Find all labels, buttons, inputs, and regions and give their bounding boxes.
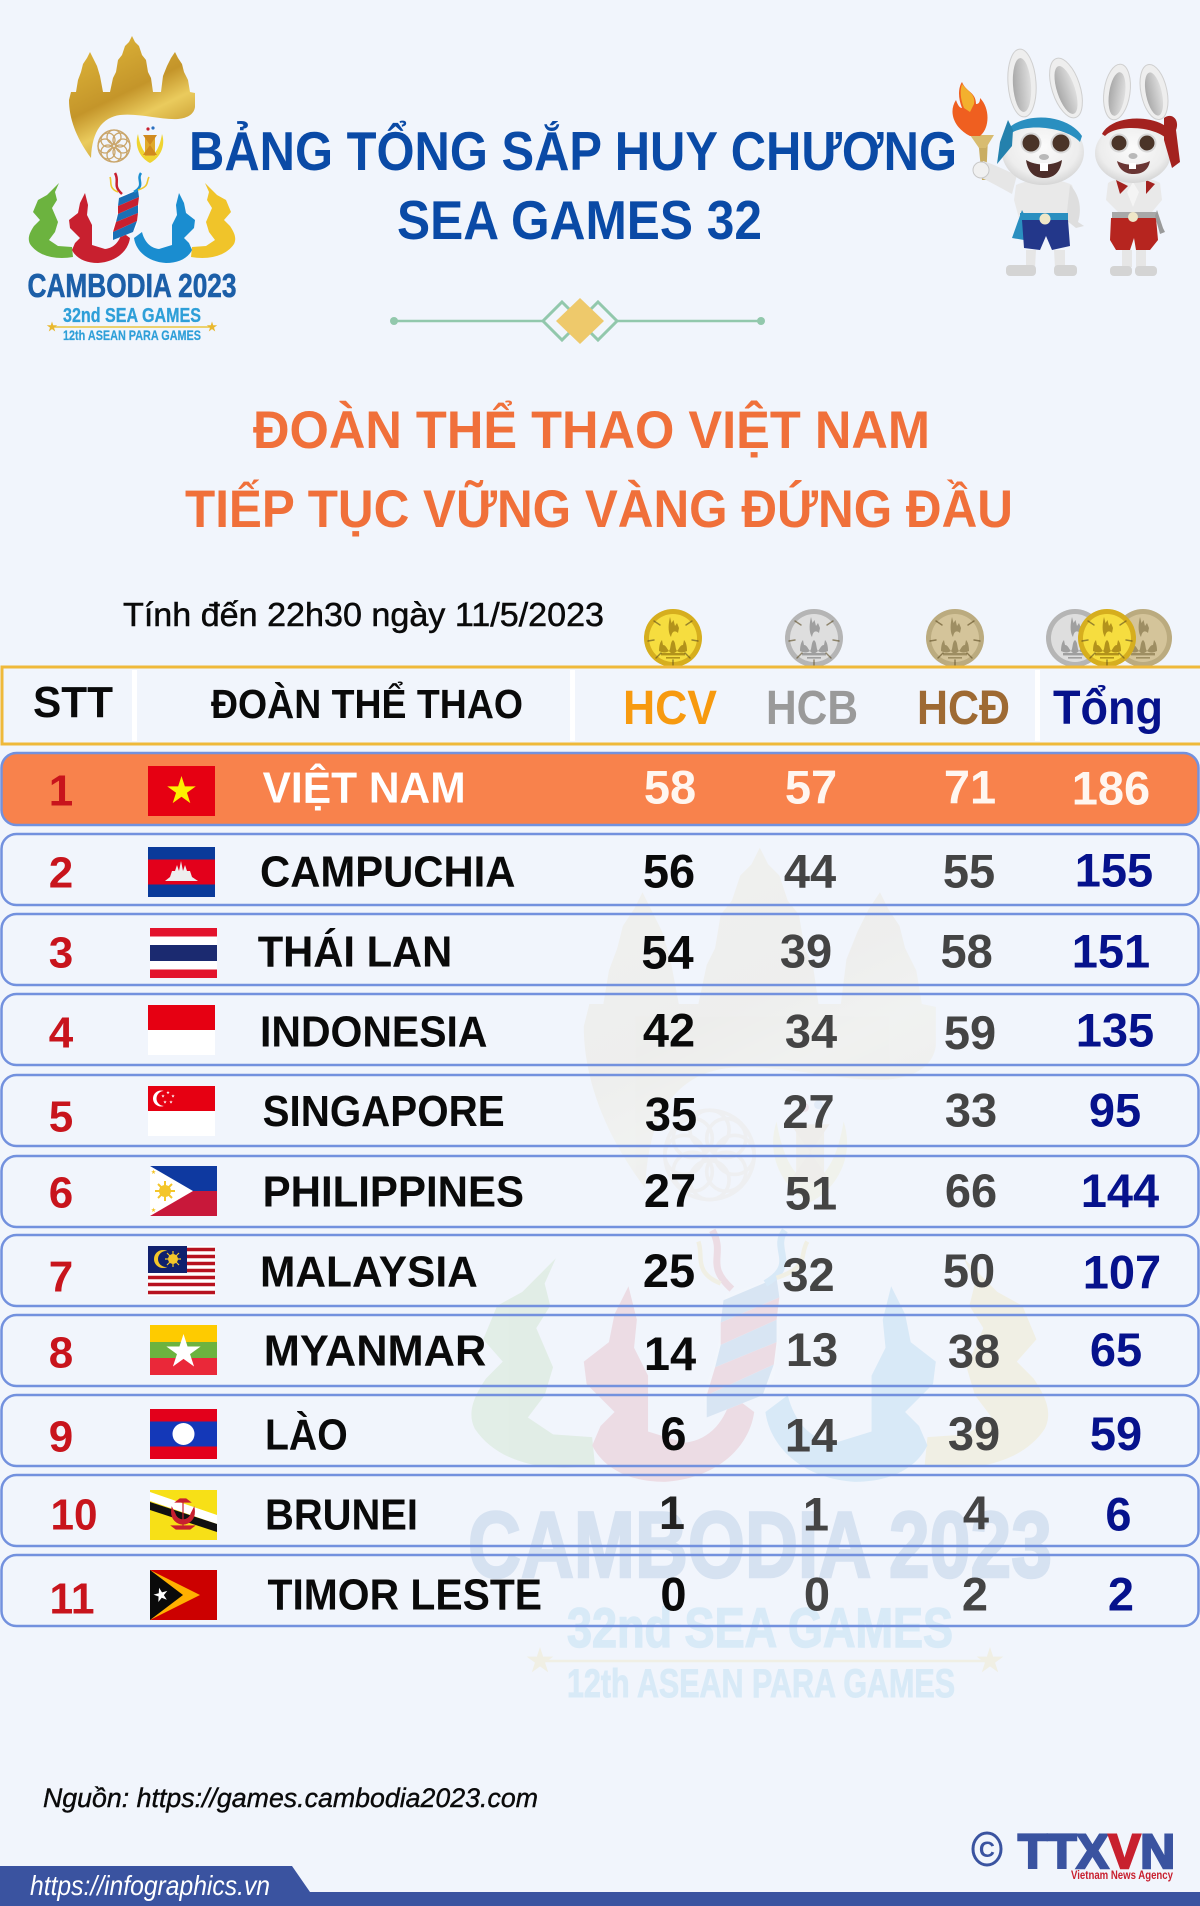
- flag: Malaysia: [148, 1246, 215, 1296]
- row 7: Malaysia: 7: [49, 1252, 73, 1302]
- medal counts: 186: [1072, 762, 1150, 814]
- title: BẢNG TỔNG SẮP HUY CHƯƠNG: [189, 120, 957, 182]
- medal counts: 58: [644, 760, 696, 814]
- row 6: Philippines: PHILIPPINES: [263, 1168, 524, 1216]
- row 11: Timor Leste: [2, 1555, 1198, 1626]
- medal counts: 35: [645, 1088, 697, 1140]
- row 1: Việt Nam: 1: [49, 766, 73, 816]
- medal counts: 13: [786, 1323, 838, 1376]
- flag: Brunei: [150, 1490, 217, 1540]
- flag: Cambodia: [148, 847, 215, 897]
- watermark: Cambodia 2023 logo: 32nd SEA GAMES: [567, 1596, 953, 1659]
- row 4: Indonesia: [2, 994, 1198, 1065]
- row 4: Indonesia: INDONESIA: [260, 1008, 488, 1056]
- row 2: Campuchia: 2: [49, 848, 73, 898]
- medal counts: 71: [944, 760, 996, 814]
- row 5: Singapore: [2, 1075, 1198, 1146]
- icon: silver medal: [785, 609, 843, 667]
- row 1: Việt Nam: [2, 753, 1198, 825]
- table header: HCB: [766, 682, 858, 735]
- medal counts: 1: [803, 1488, 829, 1540]
- subtitle: [185, 399, 1013, 539]
- flag: Myanmar: [150, 1325, 217, 1375]
- logo: TTXVN: Vietnam News Agency: [1071, 1868, 1173, 1882]
- watermark: Cambodia 2023 logo: 12th ASEAN PARA GAMES: [567, 1662, 955, 1706]
- medal counts: 51: [785, 1166, 837, 1220]
- footer band with website: [0, 1866, 1200, 1906]
- medal counts: 38: [948, 1324, 1000, 1378]
- logo: Cambodia 2023 SEA Games: [28, 36, 236, 343]
- medal counts: [659, 1486, 1132, 1540]
- row 3: Thái Lan: 3: [49, 928, 73, 978]
- title: SEA GAMES 32: [397, 189, 762, 251]
- logo: TTXVN: C: [979, 1837, 995, 1862]
- medal counts: [644, 1164, 1159, 1220]
- row 9: Lào: [2, 1395, 1198, 1466]
- row 3: Thái Lan: THÁI LAN: [258, 926, 452, 976]
- row 8: Myanmar: 8: [49, 1328, 73, 1378]
- row 10: Brunei: [2, 1475, 1198, 1546]
- row 11: Timor Leste: 11: [50, 1574, 94, 1624]
- medal counts: [644, 1323, 1142, 1380]
- medal icons: [644, 609, 1172, 667]
- logo: TTXVN: TTXVN: [1018, 1826, 1175, 1879]
- medal counts: 0: [660, 1568, 687, 1620]
- icon: three medals: [1046, 609, 1172, 667]
- medal counts: 4: [963, 1486, 989, 1539]
- title: [189, 120, 957, 251]
- medal counts: 59: [944, 1006, 996, 1059]
- row 8: Myanmar: [2, 1315, 1198, 1386]
- row 2: Campuchia: [2, 834, 1198, 905]
- medal counts: 14: [785, 1408, 837, 1462]
- medal counts: [643, 844, 1153, 898]
- medal counts: 39: [780, 924, 832, 978]
- medal counts: 57: [785, 760, 837, 814]
- mascot: girl rabbit: [1095, 62, 1180, 276]
- row 6: Philippines: 6: [49, 1168, 73, 1218]
- flag: Thailand: [150, 928, 217, 978]
- row 9: Lào: LÀO: [265, 1410, 348, 1460]
- medal counts: [660, 1568, 1134, 1620]
- flag: Singapore: [148, 1086, 215, 1136]
- medal counts: [643, 1244, 1161, 1301]
- medal counts: 6: [660, 1407, 687, 1460]
- row 6: Philippines: [2, 1156, 1198, 1227]
- medal counts: [645, 1084, 1141, 1140]
- medal counts: 27: [782, 1085, 835, 1138]
- flag: Laos: [150, 1409, 217, 1459]
- medal counts: [644, 760, 1150, 814]
- medal counts: 107: [1083, 1246, 1161, 1298]
- medal counts: 66: [945, 1164, 997, 1217]
- medal counts: 95: [1089, 1084, 1141, 1136]
- table header: HCĐ: [917, 682, 1010, 735]
- row 8: Myanmar: MYANMAR: [264, 1326, 486, 1376]
- icon: bronze medal: [926, 609, 984, 667]
- medal counts: 1: [659, 1486, 685, 1539]
- medal counts: 50: [943, 1244, 995, 1297]
- table header: ĐOÀN THỂ THAO: [211, 680, 523, 727]
- medal counts: 144: [1081, 1164, 1159, 1217]
- logo: Cambodia 2023 SEA Games: 12th ASEAN PARA GAMES: [63, 327, 201, 343]
- medal counts: 42: [643, 1004, 695, 1056]
- medal counts: [641, 924, 1150, 978]
- row 4: Indonesia: 4: [49, 1008, 74, 1058]
- medal counts: 34: [785, 1004, 837, 1058]
- medal counts: 56: [643, 844, 695, 898]
- medal counts: 6: [1105, 1488, 1132, 1540]
- row 10: Brunei: 10: [50, 1490, 98, 1540]
- table header: STT: [33, 678, 113, 727]
- subtitle: TIẾP TỤC VỮNG VÀNG ĐỨNG ĐẦU: [185, 479, 1013, 539]
- medal counts: 14: [644, 1327, 696, 1380]
- flag: Vietnam: [148, 766, 215, 816]
- flag: Indonesia: [148, 1005, 215, 1055]
- torch: [952, 82, 994, 180]
- medal counts: 0: [804, 1568, 830, 1620]
- footer band with website: https://infographics.vn: [30, 1870, 270, 1901]
- row 7: Malaysia: MALAYSIA: [260, 1248, 478, 1296]
- medal counts: 27: [644, 1164, 696, 1217]
- medal counts: 32: [782, 1248, 835, 1301]
- table header: HCV: [623, 682, 717, 735]
- medal counts: 44: [784, 844, 836, 898]
- medal counts: [643, 1004, 1154, 1059]
- logo: Cambodia 2023 SEA Games: 32nd SEA GAMES: [63, 305, 201, 327]
- title divider ornament: [390, 298, 765, 344]
- medal counts: 155: [1075, 844, 1153, 896]
- medal counts: 135: [1076, 1004, 1154, 1056]
- mascot: boy rabbit with torch: [952, 48, 1089, 276]
- medal counts: 2: [962, 1568, 988, 1620]
- flag: Timor Leste: [150, 1570, 217, 1620]
- medal counts: 59: [1090, 1407, 1142, 1460]
- table header: [2, 667, 1200, 744]
- watermark: Cambodia 2023 logo: [468, 848, 1052, 1706]
- row 5: Singapore: SINGAPORE: [263, 1087, 505, 1136]
- date note: Tính đến 22h30 ngày 11/5/2023: [123, 596, 604, 633]
- row 2: Campuchia: CAMPUCHIA: [260, 848, 516, 896]
- medal counts: 65: [1090, 1323, 1142, 1376]
- row 10: Brunei: BRUNEI: [265, 1490, 418, 1540]
- medal counts: 39: [948, 1407, 1000, 1460]
- icon: gold medal: [644, 609, 702, 667]
- row 5: Singapore: 5: [49, 1092, 73, 1142]
- subtitle: ĐOÀN THỂ THAO VIỆT NAM: [253, 399, 930, 460]
- medal counts: 55: [943, 844, 995, 898]
- logo: Cambodia 2023 SEA Games: CAMBODIA 2023: [28, 267, 236, 304]
- medal counts: 58: [940, 924, 993, 978]
- row 11: Timor Leste: TIMOR LESTE: [268, 1570, 542, 1620]
- medal counts: [660, 1407, 1142, 1462]
- row 7: Malaysia: [2, 1235, 1198, 1306]
- medal counts: 151: [1072, 924, 1150, 978]
- row 9: Lào: 9: [49, 1412, 73, 1462]
- row 1: Việt Nam: VIỆT NAM: [263, 762, 466, 812]
- row 3: Thái Lan: [2, 914, 1198, 985]
- flag: Philippines: [150, 1166, 217, 1216]
- medal counts: 54: [641, 926, 694, 978]
- medal counts: 25: [643, 1244, 695, 1297]
- medal counts: 2: [1108, 1568, 1134, 1620]
- watermark: Cambodia 2023 logo: CAMBODIA 2023: [468, 1492, 1052, 1597]
- table header: Tổng: [1053, 682, 1163, 735]
- medal counts: 33: [945, 1084, 997, 1136]
- source note: Nguồn: https://games.cambodia2023.com: [43, 1783, 538, 1813]
